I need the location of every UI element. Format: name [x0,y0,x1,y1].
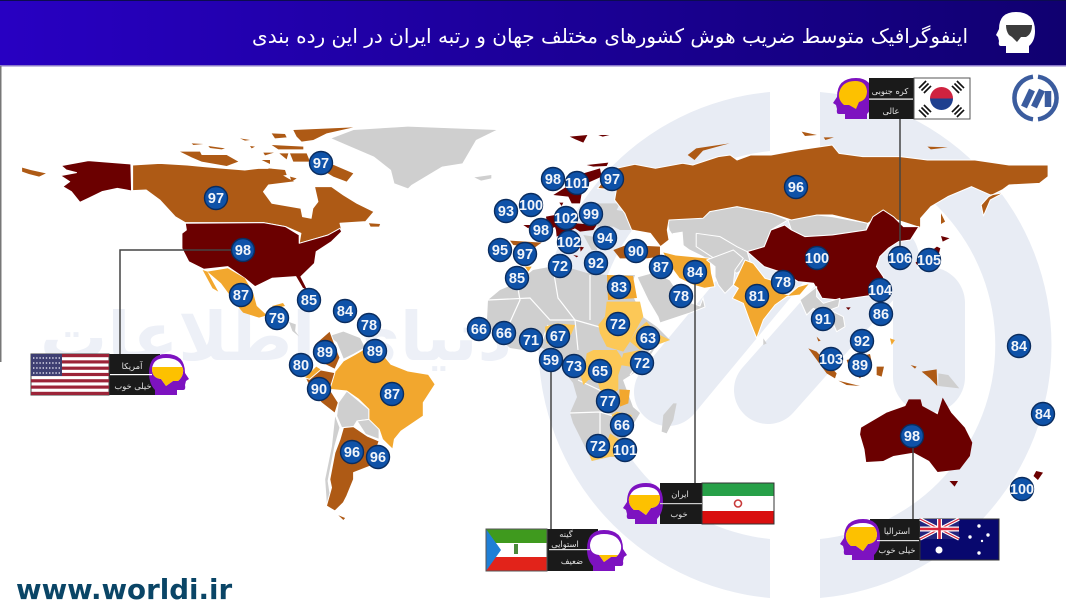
bubble: Argentina 96: 96 [344,445,360,461]
brain head [587,530,627,571]
China [747,210,919,300]
bubble: Indonesia 89 [848,354,872,376]
map: North America [22,127,496,306]
logo: top right [1014,77,1057,119]
bubble: Brazil 87: 87 [384,387,400,403]
bubble: Kenya 72: 72 [634,356,650,372]
bubble: Morocco 85 [506,266,528,290]
Central America [289,322,299,337]
Kenya [620,350,650,368]
bubble: UK 100: 100 [519,198,543,214]
watermark: logo rings and bars [539,92,1051,598]
Zimbabwe [612,412,632,433]
bubble: Uruguay 96: 96 [370,450,386,466]
bubble: China 100 [805,246,829,270]
map: Saudi Arabia [637,272,705,323]
Nigeria [545,323,575,345]
map: Canadian Arctic islands [180,127,353,182]
brain head [149,354,189,395]
Turkey [613,245,660,258]
callout: Australia: استرالیا [884,526,910,536]
bubble: Canada north 97 [310,152,332,174]
bubble: France 98: 98 [533,223,549,239]
Mongolia [788,215,868,237]
bubble: Spain 97 [514,242,536,266]
bubble: Zimbabwe 66 [610,414,634,436]
brain head [623,483,663,524]
bubble: Greece 92: 92 [588,256,604,272]
bubble: Tunisia 72 [548,254,572,278]
bubble: Greece 92 [584,252,608,274]
Papua western [911,365,917,369]
bubble: Guatemala 79: 79 [269,311,285,327]
bubble: Sweden 98 [542,168,564,190]
bubble: Australia 98: 98 [904,429,920,445]
bubble: Egypt 83: 83 [611,280,627,296]
Eastern Europe [597,203,647,230]
bubble: Gabon 73 [562,354,586,378]
bubble: Sudan 72 [606,312,630,336]
flag: Australia [920,519,999,560]
Papua New Guinea [938,373,959,388]
bubble: Finland 101: 101 [565,176,589,192]
bubble: Pacific 84: 84 [1011,339,1027,355]
bubble: USA 98 [232,238,254,262]
brain head [833,78,873,119]
bubble: Cuba 85 [298,288,320,312]
bubble: Fiji 84 [1032,402,1054,426]
Peru [304,369,338,413]
callout: Equatorial Guinea [486,529,627,571]
bubble: New Zealand 100: 100 [1010,482,1034,498]
Bolivia [337,391,369,428]
map: Europe [510,163,660,272]
Taiwan [846,307,851,310]
flag: South Korea [914,78,970,119]
bubble: Pacific 84 [1008,334,1030,358]
bubble: Indonesia 89: 89 [852,358,868,374]
Paraguay [357,419,379,439]
bubble: Gabon 73: 73 [566,359,582,375]
map: South Asia and Oceania [707,250,959,388]
Sri Lanka [763,338,767,345]
bubble: South Korea 106: 106 [888,251,912,267]
bubble: Ecuador 80 [290,354,312,376]
bubble: Nigeria 67 [546,324,570,348]
callout: USA: آمریکا [122,360,143,371]
bubble: Canada 97 [204,186,228,210]
flag: Iran [702,483,774,524]
bubble: Iraq 87: 87 [653,260,669,276]
Africa continent [487,265,670,461]
Argentina [326,427,379,511]
bubble: India 81: 81 [749,289,765,305]
bubble: Caribbean 78 [358,314,380,336]
bubble: Japan 105: 105 [917,253,941,269]
map: Africa [487,265,677,461]
Colombia [314,331,340,369]
Canada [133,163,374,243]
bubble: Philippines 86: 86 [873,307,889,323]
Iceland [474,175,491,181]
bubble: Germany 102: 102 [554,211,578,227]
Central Europe [553,222,597,237]
Caspian Sea [672,232,684,253]
bubble: Northern Europe 97 [600,168,624,190]
bubble: Morocco 85: 85 [509,271,525,287]
value bubbles [204,152,1054,500]
Philippines [890,338,895,345]
bubble: Germany 102 [554,206,578,230]
callout: Equatorial Guinea: گینه [559,529,573,539]
bubble: Caribbean 84 [334,300,356,322]
callout: Equatorial Guinea: ضعیف [561,556,583,566]
bubble: Saudi Arabia 78 [670,284,692,308]
bubble: South Africa 72: 72 [590,439,606,455]
page edge line [0,66,2,362]
bubble: Colombia 89: 89 [317,345,333,361]
bubble: Ecuador 80: 80 [293,358,309,374]
bubble: Turkey 90: 90 [628,244,644,260]
bubble: West Africa 66 second: 66 [496,326,512,342]
callout: South Korea [833,78,970,119]
bubble: France 98 [530,218,552,242]
title: اینفوگرافیک متوسط ضریب هوش کشورهای مختلف جهان و رتبه ایران در این رده بندی [252,24,968,48]
Spain [510,241,542,247]
bubble: Peru 90 [308,378,330,400]
bubble: Caribbean 84: 84 [337,304,353,320]
Sudan [545,302,677,461]
bubble: Southern Africa 101 [613,438,637,462]
watermark: text: دنیای اطلاعات [40,298,512,376]
Sumatra [808,348,837,378]
bubble: Guyana 89 [364,340,386,362]
Norway Arctic islands [570,135,587,143]
bubble: West Africa 66: 66 [471,322,487,338]
Java [838,381,860,386]
Southeast Asia [800,287,845,332]
Borneo [847,354,872,378]
Hokkaido [941,236,950,242]
bubble: Argentina 96 [340,440,364,464]
Sulawesi [877,367,884,377]
bubble: Singapore 103: 103 [819,352,843,368]
Tierra del Fuego [338,515,345,520]
bubble: Ghana 71 [520,328,542,352]
bubble: Nigeria 67: 67 [550,329,566,345]
callout: South Korea: کره جنوبی [872,86,908,96]
DR Congo [580,350,623,395]
bubble: Russia 96: 96 [788,180,804,196]
map: Asia [570,132,1048,300]
bubble: Zambia 77: 77 [600,394,616,410]
Chile [325,414,340,504]
bubble: Ethiopia 63 [636,326,660,350]
bubble: Portugal 95 [488,238,512,262]
bubble: Equatorial Guinea 59 [540,348,562,372]
bubble: Zimbabwe 66: 66 [614,418,630,434]
bubble: Uruguay 96 [366,446,390,468]
bubble: Japan 105 [917,248,941,272]
bubble: Nepal 78 [772,270,794,294]
bubble: DR Congo 65: 65 [592,364,608,380]
bubble: Spain 97: 97 [517,247,533,263]
bubble: Iran 84: 84 [687,265,703,281]
Central Asia [667,207,788,273]
bubble: Turkey 90 [624,240,648,262]
bubble: UK 100 [519,194,543,216]
bubble: Zambia 77 [596,390,620,412]
USA [182,223,342,290]
bubble: China 100: 100 [805,251,829,267]
bubble: Guyana 89: 89 [367,344,383,360]
bubble: Guatemala 79 [266,306,288,330]
bubble: Caribbean 78: 78 [361,318,377,334]
Afghanistan and Pakistan [707,250,743,293]
bubble: Portugal 95: 95 [492,243,508,259]
bubble: Mexico 87 [230,284,252,306]
callout: Australia: خیلی خوب [878,545,916,555]
bubble: Cuba 85: 85 [301,293,317,309]
bubble: Thailand 91 [812,308,834,330]
bubble: Poland 99: 99 [583,207,599,223]
map: Cuba [272,303,285,308]
bubble: New Zealand 100 [1010,478,1034,500]
bubble: South Korea 106 [888,246,912,270]
flag: USA [31,354,109,395]
Southern Mexico [235,303,267,318]
Egypt [607,275,637,300]
bubble: Sweden 98: 98 [545,172,561,188]
bubble: Ghana 71: 71 [523,333,539,349]
Russia [598,145,1048,247]
Gulf of Saint Lawrence island [369,223,380,227]
bubble: Ireland 93: 93 [498,204,514,220]
Mexico [207,268,257,306]
Ethiopia [630,322,670,350]
bubble: Colombia 89 [314,340,336,364]
callout: USA [31,354,189,395]
bubble: Malaysia 92 [850,330,874,352]
bubble: Nepal 78: 78 [775,275,791,291]
Africa country borders [488,268,655,450]
bubble: Iran 84 [684,260,706,284]
bubble: Sudan 72: 72 [610,317,626,333]
bubble: Singapore 103 [819,348,843,370]
Arctic islands [688,143,730,160]
Brazil [330,349,435,449]
Madagascar [662,403,677,433]
bubble: Saudi Arabia 78: 78 [673,289,689,305]
brain head [840,519,880,560]
bubble: Kenya 72 [630,352,654,374]
bubble: West Africa 66 [468,318,490,340]
callout: Australia [840,519,999,560]
callout: USA: خیلی خوب [114,381,152,391]
leader lines [120,119,913,529]
icon: header head with brain [996,12,1035,53]
bubble: Poland 99 [580,202,602,226]
Ireland [523,225,531,228]
India [732,260,810,338]
Balkans [583,235,597,250]
bubble: Ireland 93 [494,200,518,222]
Italy islands [573,255,578,257]
Morocco accent [525,267,532,272]
bubble: Peru 90: 90 [311,382,327,398]
bubble: Balkans 94 [594,226,616,250]
Japan [916,247,940,265]
bubble: South Africa 72 [586,434,610,458]
Greenland [332,127,496,188]
bubble: Egypt 83 [608,276,630,298]
Central Asia borders [696,233,747,260]
bubble: Italy 102 [557,230,581,254]
bubble: Ethiopia 63: 63 [640,331,656,347]
bubble: Taiwan 104 [868,278,892,302]
callout: Iran: خوب [670,509,688,519]
website url: www.worldi.ir [16,573,233,606]
Svalbard [587,163,608,167]
map: Australia and New Zealand [860,398,1043,487]
Tanzania [619,389,630,407]
bubble: Finland 101 [565,172,589,194]
bubble: West Africa 66 second [492,322,516,344]
bubble: Australia 98 [900,424,924,448]
callout: Equatorial Guinea: استوایی [551,539,579,549]
bubble: Northern Europe 97: 97 [604,172,620,188]
bubble: USA 98: 98 [235,243,251,259]
Denmark [559,203,563,206]
bubble: Taiwan 104: 104 [868,283,892,299]
map: Central and South America [235,303,435,520]
bubble: Malaysia 92: 92 [854,334,870,350]
bubble: Southern Africa 101: 101 [613,443,637,459]
Australia [860,398,972,472]
bubble: India 81 [746,284,768,308]
bubble: Mexico 87: 87 [233,288,249,304]
bubble: Balkans 94: 94 [597,231,613,247]
callout: Iran [623,483,774,524]
bubble: Thailand 91: 91 [815,312,831,328]
bubble: Brazil 87 [380,382,404,406]
bubble: DR Congo 65 [588,360,612,382]
Malaysia [817,337,821,341]
Alaska [61,161,132,202]
Ecuador [304,366,321,379]
bubble: Russia 96 [784,176,808,198]
New Zealand [1033,471,1043,480]
bubble: Italy 102: 102 [557,235,581,251]
Tasmania [950,481,958,487]
bubble: Philippines 86 [870,302,892,326]
Scandinavia [553,168,602,203]
Sakhalin [941,213,945,224]
flag: Equatorial Guinea [486,529,547,571]
bubble: Equatorial Guinea 59: 59 [543,353,559,369]
Iran [662,252,715,288]
bubble: Canada 97: 97 [208,191,224,207]
Venezuela and Guianas [328,331,366,359]
callout: South Korea: عالی [883,106,900,116]
callout: Iran: ایران [671,489,689,499]
bubble: Iraq 87 [650,256,672,278]
UK [546,215,560,228]
bubble: Tunisia 72: 72 [552,259,568,275]
bubble: Fiji 84: 84 [1035,407,1051,423]
bubble: Canada north 97: 97 [313,156,329,172]
header bar [0,0,1066,66]
Aleutians [22,168,46,177]
South Africa [587,433,630,461]
